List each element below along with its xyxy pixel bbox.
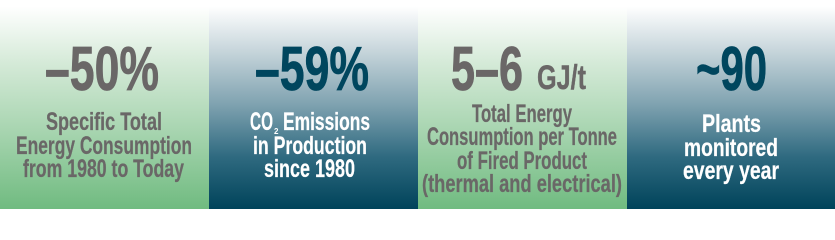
description: CO2 emissions in production: CO bbox=[250, 108, 273, 136]
statistic: 5-6 GJ/t: GJ/t bbox=[537, 59, 586, 97]
panel: CO2 emissions bbox=[209, 0, 418, 209]
description: total energy consumption per tonne: Total Energy bbox=[472, 100, 572, 128]
description: specific total energy consumption bbox=[16, 108, 192, 183]
description: CO2 emissions in production bbox=[250, 108, 370, 183]
statistic: -50%: –50% bbox=[45, 35, 159, 104]
panel: plants monitored bbox=[627, 0, 835, 209]
description: CO2 emissions in production: since 1980 bbox=[264, 155, 355, 183]
description: total energy consumption per tonne: of Fired Product bbox=[457, 147, 587, 175]
panel: energy per tonne bbox=[418, 0, 627, 209]
description: total energy consumption per tonne: Consumption per Tonne bbox=[427, 123, 617, 151]
description: CO2 emissions in production: 2 bbox=[274, 127, 279, 136]
statistic: 5-6 GJ/t: 5–6 bbox=[451, 35, 523, 104]
description: CO2 emissions in production: Emissions bbox=[283, 108, 370, 136]
description: plants monitored every year: monitored bbox=[684, 134, 778, 162]
description: specific total energy consumption: Specific Total bbox=[46, 108, 162, 136]
description: plants monitored every year: Plants bbox=[702, 110, 761, 138]
panel: specific total energy consumption bbox=[0, 0, 209, 209]
statistic: ~90: ~90 bbox=[696, 35, 767, 104]
statistic: -59%: –59% bbox=[255, 35, 369, 104]
description: total energy consumption per tonne: (thermal and electrical) bbox=[422, 170, 622, 198]
description: CO2 emissions in production: in Production bbox=[253, 132, 367, 160]
description: specific total energy consumption: from 1980 to Today bbox=[23, 155, 184, 183]
description: plants monitored every year bbox=[683, 110, 779, 185]
description: specific total energy consumption: Energy Consumption bbox=[16, 132, 192, 160]
description: total energy consumption per tonne bbox=[422, 100, 622, 198]
description: plants monitored every year: every year bbox=[683, 157, 779, 185]
